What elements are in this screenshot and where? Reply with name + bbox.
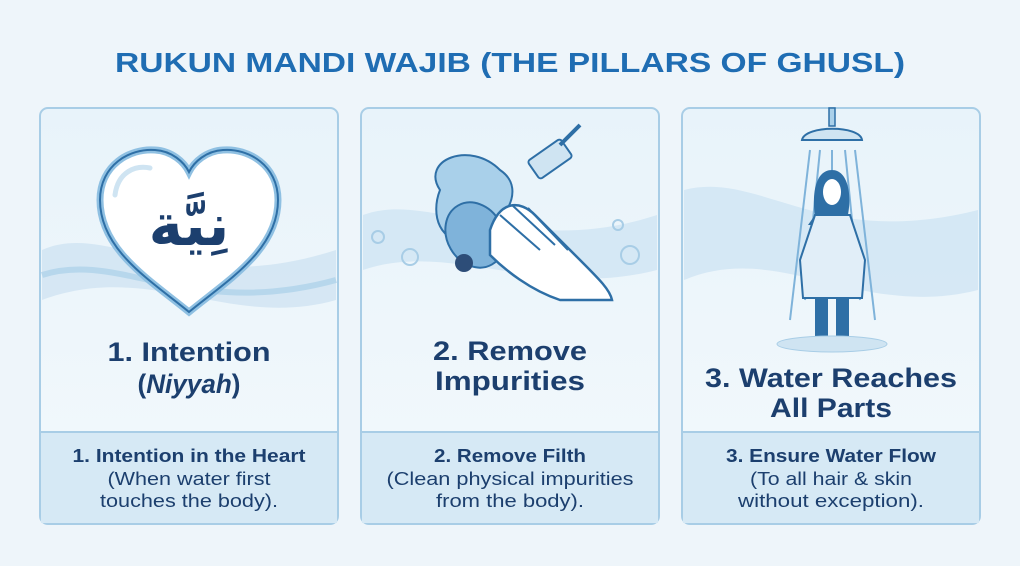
panel: water reaches all parts: without exception). [737,491,924,511]
heading: intention: 1. Intention [108,337,270,367]
panel: remove impurities: (Clean physical impurities [386,469,634,489]
icon: person under shower [777,108,887,352]
panel: water reaches all parts [682,108,980,524]
icon: heart with niyyah: نِيَّة [149,191,229,259]
heading: water reaches all parts: 3. Water Reaches [705,363,957,393]
text: ensure water flow detail: 3. Ensure Water Flow [726,446,937,466]
panel: intention: (Niyyah) [137,369,240,399]
heading: remove impurities: 2. Remove [433,336,587,366]
icon: heart with niyyah [100,150,278,312]
text: intention detail: 1. Intention in the Heart [72,446,306,466]
panel: water reaches all parts: (To all hair & skin [750,469,912,489]
title: RUKUN MANDI WAJIB (THE PILLARS OF GHUSL) [115,47,905,78]
panel: remove impurities: Impurities [435,366,585,396]
panel: intention [40,108,338,524]
text: remove filth detail: 2. Remove Filth [434,446,586,466]
panel: water reaches all parts: All Parts [770,393,892,423]
panel: intention: touches the body). [100,491,278,511]
panel: remove impurities: from the body). [436,491,584,511]
panel: intention: (When water first [108,469,270,489]
icon: hand scrubbing [372,125,639,300]
panel: remove impurities [361,108,659,524]
